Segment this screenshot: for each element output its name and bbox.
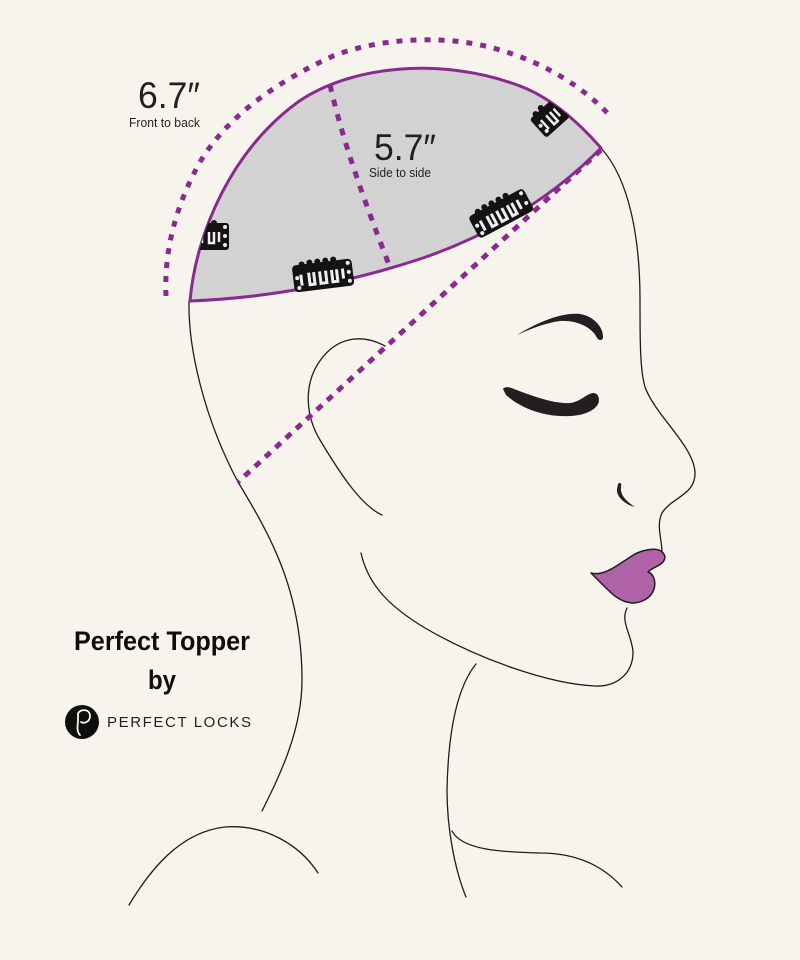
nostril xyxy=(617,483,635,507)
wordmark: PERFECT LOCKS xyxy=(107,714,251,731)
label: 5.7 inches side to side xyxy=(369,127,436,180)
collarbone xyxy=(452,831,622,887)
clip: top right xyxy=(530,102,569,137)
closed eye xyxy=(503,387,599,416)
face profile xyxy=(601,148,695,552)
clip: lower left xyxy=(291,254,354,293)
chin and jaw line xyxy=(361,553,633,686)
dashed arc: front to back xyxy=(166,40,612,296)
panel: topper cap area xyxy=(190,68,601,301)
label: 5.7 inches side to side: Side to side xyxy=(369,166,431,180)
title: Perfect Topper by: Perfect Topper xyxy=(74,626,250,656)
lips xyxy=(591,549,665,603)
clip: lower right xyxy=(466,184,534,239)
icon: logo circle xyxy=(65,705,99,739)
ear xyxy=(308,339,385,515)
shoulder xyxy=(129,827,318,905)
infographic: topper measurements on head xyxy=(65,37,696,906)
label: 6.7 inches front to back: Front to back xyxy=(129,116,201,130)
front of neck xyxy=(447,664,476,897)
title: Perfect Topper by xyxy=(74,626,250,695)
clip: left edge xyxy=(200,220,229,250)
label: 6.7 inches front to back: 6.7″ xyxy=(138,75,200,116)
dashed line: topper base xyxy=(238,150,601,482)
label: 5.7 inches side to side: 5.7″ xyxy=(374,127,436,168)
back of head and neck xyxy=(189,301,302,811)
label: 6.7 inches front to back xyxy=(129,75,201,130)
title: Perfect Topper by: by xyxy=(148,665,176,695)
eyebrow xyxy=(517,314,603,340)
head outline xyxy=(129,148,695,905)
logo: Perfect Locks xyxy=(65,705,251,739)
dashed line: side to side xyxy=(330,85,391,270)
